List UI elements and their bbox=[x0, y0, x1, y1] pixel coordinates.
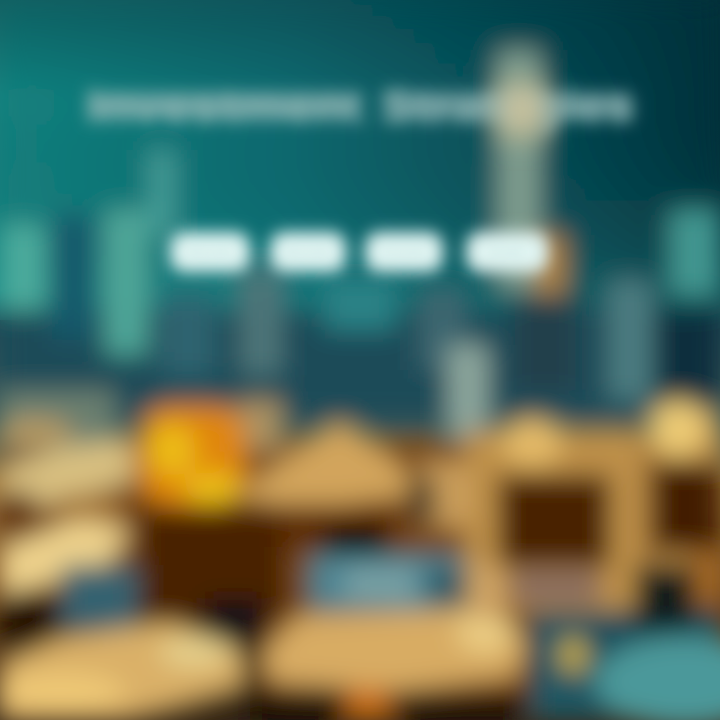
callout: four white labels: Bonds bbox=[286, 244, 330, 260]
callout: four white labels: Gold bbox=[489, 244, 521, 260]
panel: golden foreground base bbox=[0, 390, 720, 720]
callout: four white labels: Funds bbox=[383, 244, 425, 260]
panel: blurred city skyline bbox=[0, 50, 720, 445]
callout: four white labels bbox=[170, 232, 548, 272]
icon: glowing gold coin bbox=[140, 405, 245, 505]
panel: lower gold bars bbox=[0, 565, 526, 720]
chart: teal label panel bbox=[310, 555, 466, 610]
panel: teal sky background bbox=[0, 0, 720, 320]
panel: teal water lower right bbox=[535, 625, 720, 720]
title: Investment Strategies bbox=[85, 80, 635, 132]
icon: cross-shaped tower highlight bbox=[498, 82, 546, 138]
callout: four white labels: Stocks bbox=[187, 244, 233, 260]
panel: gold blocks and teal gaps bbox=[0, 400, 720, 645]
icon: small gold coin bbox=[559, 636, 587, 674]
